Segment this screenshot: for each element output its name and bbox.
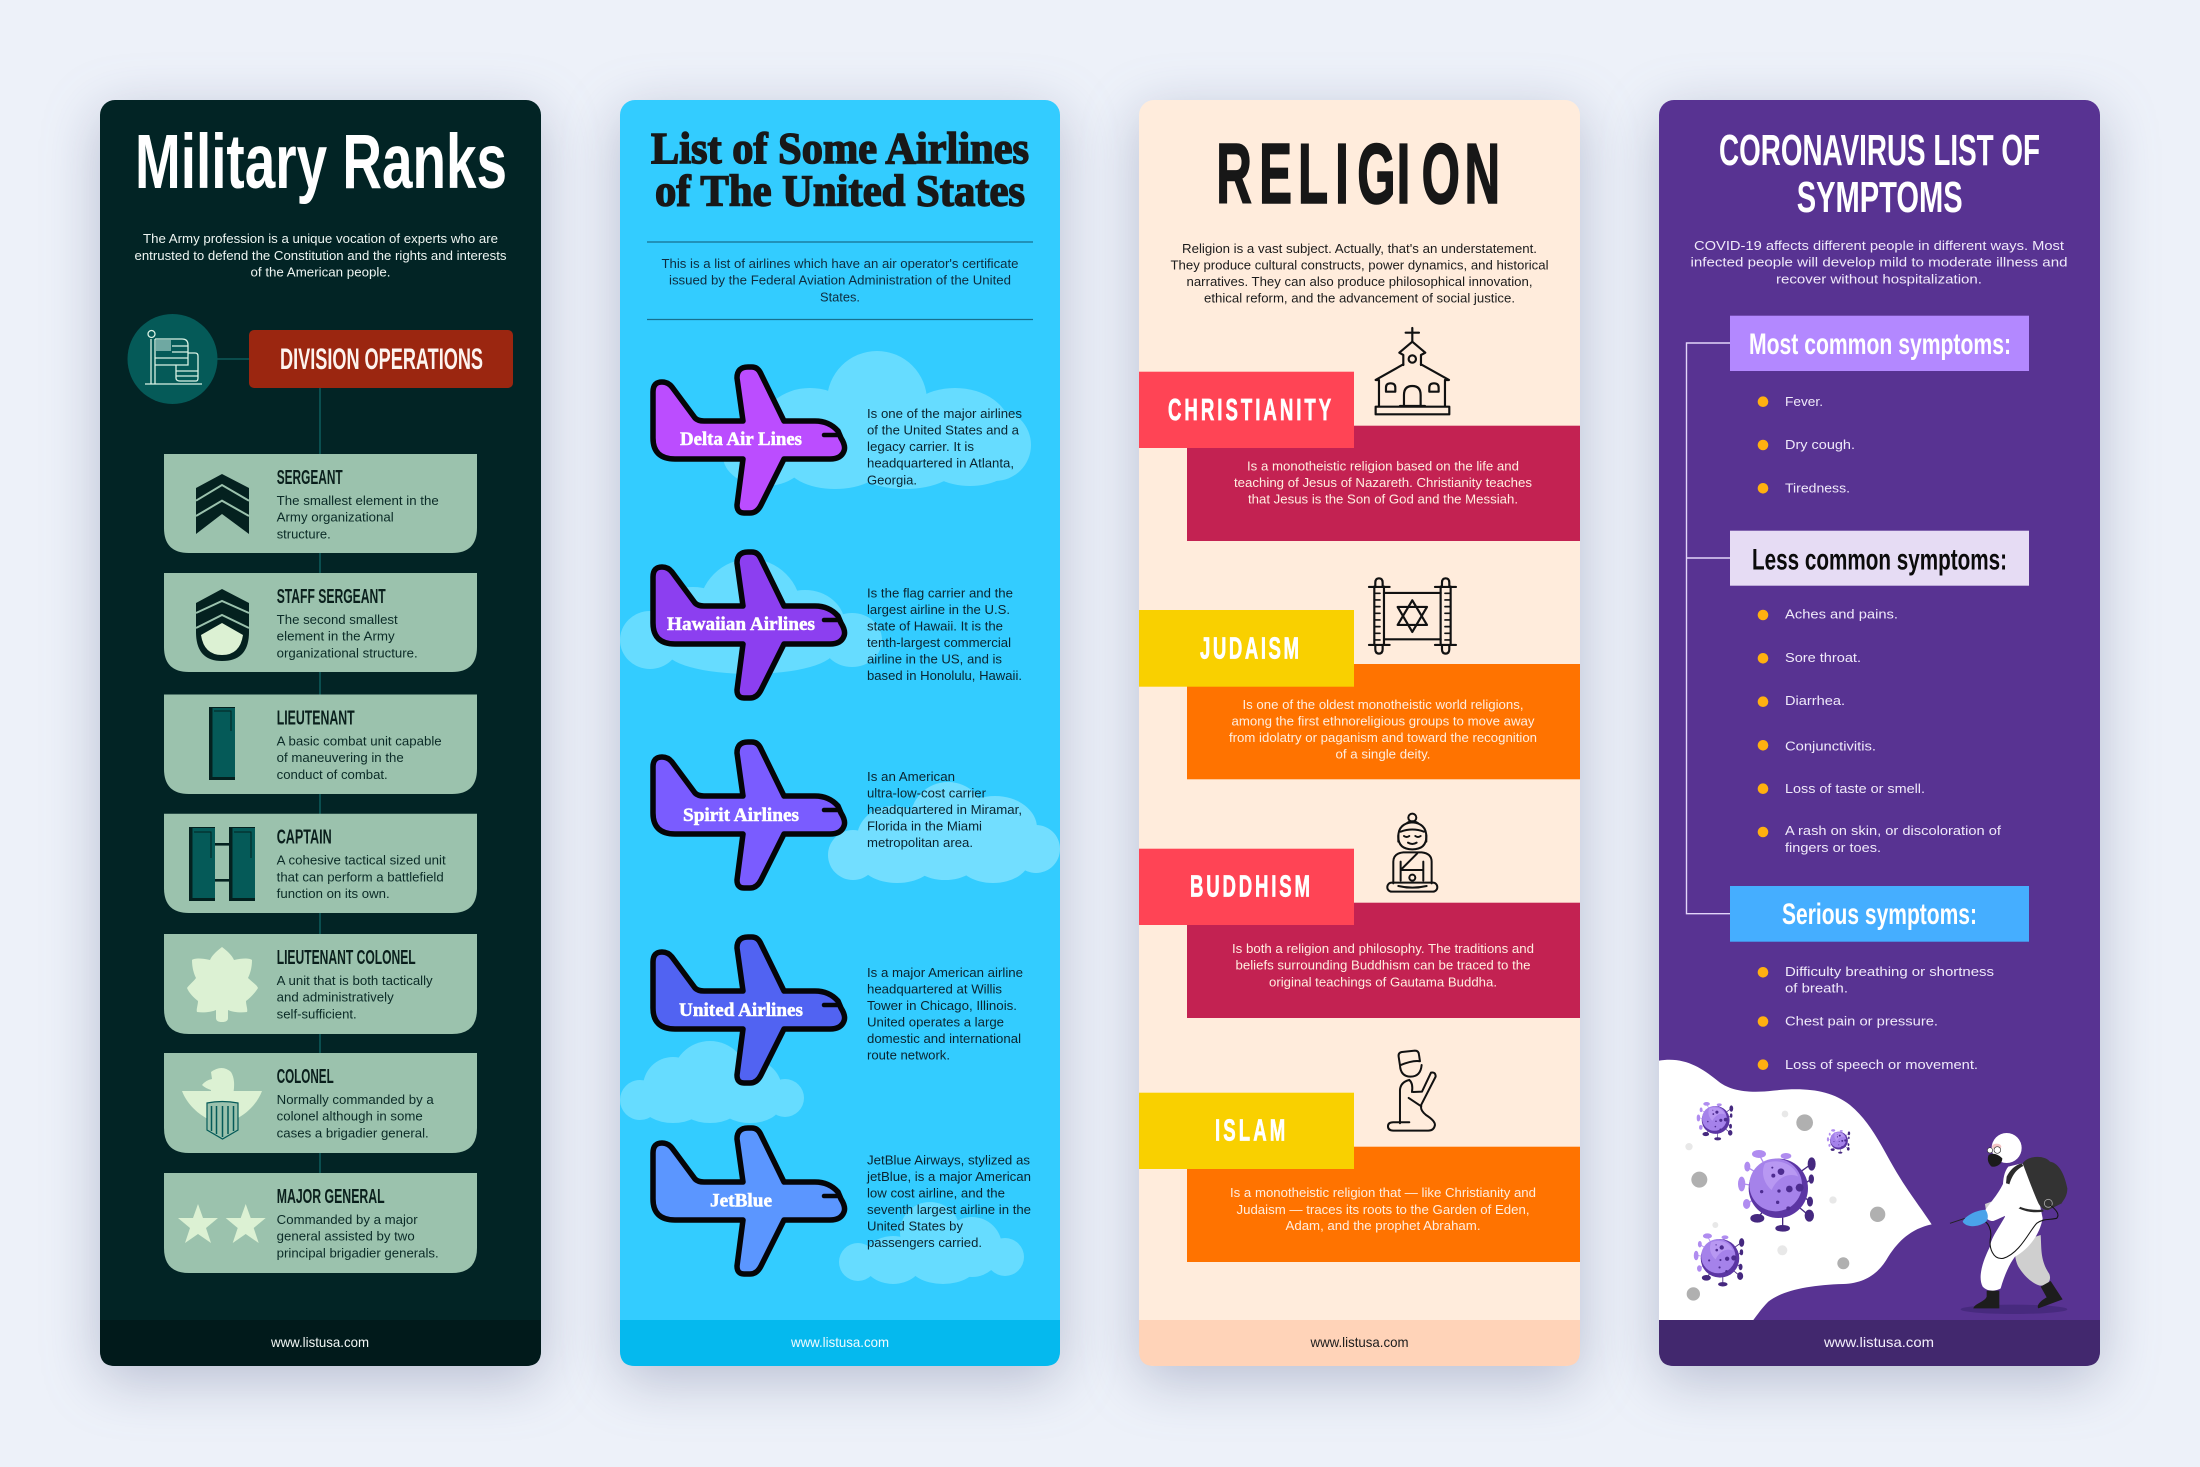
rank card: sergeant: Army organizational	[277, 510, 394, 525]
section: judaism: among the first ethnoreligious groups to move away	[1232, 714, 1535, 728]
icon: praying figure	[1388, 1051, 1436, 1131]
airline: jetblue: passengers carried.	[867, 1235, 982, 1250]
airline: hawaiian: largest airline in the U.S.	[867, 602, 1010, 617]
icon: lieutenant bar	[209, 707, 235, 780]
icon: spirit plane	[653, 742, 845, 888]
rank card: lieutenant colonel	[164, 934, 477, 1034]
list: less common symptoms: Loss of taste or smell.	[1785, 781, 1925, 796]
airline: hawaiian: tenth-largest commercial	[867, 635, 1011, 650]
section: judaism	[1139, 578, 1580, 779]
airline: hawaiian: Is the flag carrier and the	[867, 586, 1013, 600]
airline: united: Tower in Chicago, Illinois.	[867, 998, 1017, 1013]
rank card: captain	[164, 814, 477, 913]
airline: delta: Is one of the major airlines	[867, 406, 1023, 421]
section: buddhism: Is both a religion and philosophy. The traditions and	[1232, 941, 1534, 956]
rank card: sergeant: SERGEANT	[277, 467, 343, 489]
list: less common symptoms	[1758, 606, 2001, 855]
rank card: major general: general assisted by two	[277, 1229, 415, 1244]
icon: buddha	[1387, 814, 1437, 892]
intro text: coronavirus: recover without hospitalization.	[1776, 271, 1982, 286]
airline: delta: of the United States and a	[867, 422, 1020, 438]
list: serious symptoms	[1758, 964, 1995, 1072]
list: less common symptoms: Diarrhea.	[1785, 693, 1845, 708]
section: islam	[1139, 1051, 1580, 1262]
footer bar: coronavirus	[1659, 1320, 2100, 1366]
footer bar: airlines	[620, 1320, 1060, 1366]
intro text: military: The Army profession is a unique vocation of experts who are	[143, 231, 498, 246]
intro text: coronavirus	[1690, 238, 2068, 286]
intro text: coronavirus: infected people will develop mild to moderate illness and	[1690, 255, 2068, 270]
icon: small virus top-left	[1697, 1102, 1733, 1140]
section: christianity: teaching of Jesus of Nazareth. Christianity teaches	[1234, 475, 1533, 490]
rank card: sergeant	[164, 454, 477, 553]
list: less common symptoms: Sore throat.	[1785, 650, 1861, 665]
airline: hawaiian: based in Honolulu, Hawaii.	[867, 668, 1022, 683]
section: buddhism: original teachings of Gautama Buddha.	[1269, 974, 1497, 989]
icon: flag badge	[128, 314, 218, 404]
airline: united: route network.	[867, 1048, 950, 1062]
airline: jetblue: seventh largest airline in the	[867, 1202, 1031, 1217]
list: most common symptoms: Dry cough.	[1785, 437, 1855, 452]
rank card: staff sergeant: organizational structure.	[277, 645, 418, 660]
heading: division operations: DIVISION OPERATIONS	[280, 343, 483, 376]
rank card: colonel: Normally commanded by a	[277, 1092, 434, 1107]
heading: most common symptoms: Most common symptoms:	[1749, 328, 2011, 361]
rank card: lieutenant colonel: self-sufficient.	[277, 1006, 357, 1021]
panel: coronavirus symptoms	[1659, 100, 2100, 1366]
rank card: lieutenant	[164, 694, 477, 794]
section: buddhism	[1139, 814, 1580, 1018]
section: christianity: CHRISTIANITY	[1168, 393, 1331, 427]
list: less common symptoms: A rash on skin, or discoloration of	[1785, 823, 2001, 838]
airline: jetblue: jetBlue, is a major American	[866, 1169, 1031, 1184]
list: less common symptoms: fingers or toes.	[1785, 840, 1881, 855]
panel: airlines	[620, 100, 1060, 1366]
section: islam: Judaism — traces its roots to the Garden of Eden,	[1236, 1202, 1530, 1217]
intro text: military: entrusted to defend the Constitution and the rights and interests	[134, 248, 507, 263]
intro text: religion	[1170, 241, 1549, 306]
list: less common symptoms: Aches and pains.	[1785, 606, 1898, 622]
airline: jetblue	[653, 1128, 1031, 1274]
section: christianity: that Jesus is the Son of God and the Messiah.	[1248, 492, 1518, 506]
icon: oak leaf	[187, 947, 258, 1022]
rank card: captain: A cohesive tactical sized unit	[277, 853, 446, 868]
airline: spirit: ultra-low-cost carrier	[867, 786, 987, 800]
intro text: religion: Religion is a vast subject. Actually, that's an understatement.	[1182, 241, 1537, 256]
rank card: lieutenant: conduct of combat.	[277, 767, 388, 782]
section: islam: ISLAM	[1215, 1114, 1285, 1148]
rank card: lieutenant: LIEUTENANT	[277, 708, 355, 730]
title: airlines: List of Some Airlines	[651, 124, 1029, 173]
section: judaism: from idolatry or paganism and toward the recognition	[1229, 730, 1537, 745]
airline: delta: Delta Air Lines	[680, 429, 802, 450]
section: islam: Is a monotheistic religion that — like Christianity and	[1230, 1185, 1536, 1200]
icon: eagle	[182, 1068, 262, 1139]
title: airlines	[651, 124, 1029, 216]
airline: spirit: Spirit Airlines	[683, 805, 799, 826]
airline: hawaiian	[653, 552, 1022, 698]
section: christianity	[1139, 328, 1580, 541]
rank card: colonel: colonel although in some	[277, 1109, 423, 1124]
icon: large virus	[1739, 1151, 1815, 1231]
airline: jetblue: JetBlue Airways, stylized as	[867, 1152, 1030, 1168]
rank card: captain: that can perform a battlefield	[277, 869, 444, 884]
heading: most common symptoms	[1730, 316, 2029, 371]
airline: spirit: Is an American	[867, 769, 955, 784]
airline: delta: legacy carrier. It is	[867, 439, 975, 454]
footer bar: religion: www.listusa.com	[1310, 1334, 1408, 1350]
illustration: person in protective suit spraying	[1950, 1133, 2067, 1314]
intro text: religion: narratives. They can also produce philosophical innovation,	[1186, 274, 1532, 289]
rank card: staff sergeant	[164, 573, 477, 672]
cloud: united	[620, 1041, 804, 1123]
title: religion: RELIGION	[1216, 126, 1500, 221]
icon: sergeant chevrons	[196, 474, 249, 534]
airline: spirit	[653, 742, 1022, 888]
rank card: colonel: COLONEL	[277, 1066, 334, 1088]
airline: united: domestic and international	[867, 1031, 1021, 1046]
icon: two stars	[178, 1204, 266, 1243]
title: airlines: of The United States	[655, 166, 1025, 216]
footer bar: military: www.listusa.com	[270, 1334, 369, 1350]
rank card: staff sergeant: STAFF SERGEANT	[277, 586, 386, 608]
rank card: major general: principal brigadier generals.	[277, 1245, 439, 1260]
icon: united plane	[653, 937, 845, 1083]
icon: medium virus	[1694, 1234, 1744, 1286]
list: serious symptoms: Chest pain or pressure.	[1785, 1014, 1938, 1029]
cloud: hawaiian	[620, 559, 882, 674]
section: christianity: Is a monotheistic religion based on the life and	[1247, 458, 1519, 474]
heading: division operations	[249, 330, 513, 388]
rank card: colonel: cases a brigadier general.	[277, 1125, 429, 1140]
airline: united: United Airlines	[679, 1000, 803, 1021]
intro text: airlines: This is a list of airlines which have an air operator's certificate	[662, 256, 1018, 271]
icon: tiny virus	[1827, 1129, 1850, 1153]
airline: delta	[653, 367, 1023, 513]
list: serious symptoms: Difficulty breathing or shortness	[1785, 964, 1995, 979]
rank card: staff sergeant: element in the Army	[277, 629, 395, 644]
footer bar: military	[100, 1320, 541, 1366]
airline: hawaiian: airline in the US, and is	[867, 652, 1002, 666]
cloud: spirit	[828, 782, 1060, 883]
footer bar: coronavirus: www.listusa.com	[1823, 1334, 1934, 1350]
heading: less common symptoms	[1730, 531, 2029, 586]
list: most common symptoms: Tiredness.	[1785, 480, 1850, 496]
section: judaism: Is one of the oldest monotheistic world religions,	[1242, 697, 1524, 712]
icon: delta plane	[653, 367, 845, 513]
rank card: major general: Commanded by a major	[277, 1212, 418, 1227]
airline: spirit: headquartered in Miramar,	[867, 802, 1022, 817]
intro text: airlines	[662, 256, 1018, 304]
heading: serious symptoms: Serious symptoms:	[1782, 898, 1977, 931]
section: islam: Adam, and the prophet Abraham.	[1286, 1218, 1480, 1233]
icon: captain bars	[189, 827, 255, 901]
intro text: coronavirus: COVID-19 affects different people in different ways. Most	[1694, 238, 2064, 253]
rank card: lieutenant: A basic combat unit capable	[277, 734, 442, 748]
illustration: spray cloud with viruses	[1659, 1060, 1932, 1320]
rank card: captain: function on its own.	[277, 886, 390, 901]
rank card: sergeant: structure.	[277, 526, 331, 541]
panel: religion	[1139, 100, 1580, 1366]
icon: church	[1376, 328, 1449, 414]
airline: spirit: Florida in the Miami	[867, 818, 982, 834]
intro text: military	[134, 231, 507, 280]
intro text: military: of the American people.	[250, 264, 390, 280]
panel: military ranks	[100, 100, 541, 1366]
footer bar: religion	[1139, 1320, 1580, 1366]
icon: jetblue plane	[653, 1128, 845, 1274]
icon: staff sergeant shield	[196, 589, 249, 661]
list: most common symptoms	[1758, 394, 1855, 496]
footer bar: airlines: www.listusa.com	[790, 1334, 889, 1350]
rank card: sergeant: The smallest element in the	[277, 493, 439, 508]
list: less common symptoms: Conjunctivitis.	[1785, 738, 1876, 754]
section: buddhism: beliefs surrounding Buddhism can be traced to the	[1236, 958, 1530, 973]
rank card: staff sergeant: The second smallest	[277, 612, 398, 627]
airline: delta: Georgia.	[867, 472, 917, 488]
airline: spirit: metropolitan area.	[867, 835, 973, 850]
airline: united: Is a major American airline	[867, 965, 1023, 980]
section: judaism: JUDAISM	[1200, 632, 1299, 666]
intro text: airlines: issued by the Federal Aviation Administration of the United	[669, 272, 1011, 288]
cloud: delta	[723, 351, 1031, 489]
airline: united	[653, 937, 1023, 1083]
intro text: religion: They produce cultural constructs, power dynamics, and historical	[1170, 258, 1549, 272]
icon: hawaiian plane	[653, 552, 845, 698]
title: coronavirus	[1719, 126, 2040, 222]
intro text: religion: ethical reform, and the advancement of social justice.	[1204, 290, 1515, 306]
intro text: airlines: States.	[820, 290, 860, 304]
cloud: jetblue	[839, 1202, 1024, 1284]
rank card: colonel	[164, 1053, 477, 1153]
rank card: lieutenant colonel: and administratively	[277, 990, 394, 1005]
heading: serious symptoms	[1730, 886, 2029, 942]
list: serious symptoms: Loss of speech or movement.	[1785, 1057, 1978, 1072]
rank card: lieutenant: of maneuvering in the	[277, 750, 404, 765]
airline: jetblue: United States by	[867, 1218, 963, 1234]
airline: hawaiian: Hawaiian Airlines	[667, 614, 815, 635]
list: serious symptoms: of breath.	[1785, 980, 1848, 996]
section: buddhism: BUDDHISM	[1190, 870, 1310, 904]
airline: hawaiian: state of Hawaii. It is the	[867, 618, 1003, 634]
title: military ranks: Military Ranks	[135, 119, 507, 205]
icon: torah scroll	[1369, 578, 1456, 654]
title: coronavirus: SYMPTOMS	[1797, 173, 1963, 222]
rank card: lieutenant colonel: A unit that is both tactically	[277, 973, 433, 988]
airline: united: headquartered at Willis	[867, 982, 1002, 996]
rank card: captain: CAPTAIN	[277, 827, 332, 849]
section: judaism: of a single deity.	[1336, 746, 1430, 762]
airline: united: United operates a large	[867, 1014, 1004, 1030]
airline: jetblue: JetBlue	[710, 1191, 772, 1212]
rank card: lieutenant colonel: LIEUTENANT COLONEL	[277, 947, 416, 969]
airline: jetblue: low cost airline, and the	[867, 1186, 1005, 1200]
list: most common symptoms: Fever.	[1785, 394, 1823, 409]
rank card: major general: MAJOR GENERAL	[277, 1186, 385, 1208]
heading: less common symptoms: Less common symptoms:	[1752, 543, 2007, 576]
rank card: major general	[164, 1173, 477, 1273]
airline: delta: headquartered in Atlanta,	[867, 456, 1014, 470]
